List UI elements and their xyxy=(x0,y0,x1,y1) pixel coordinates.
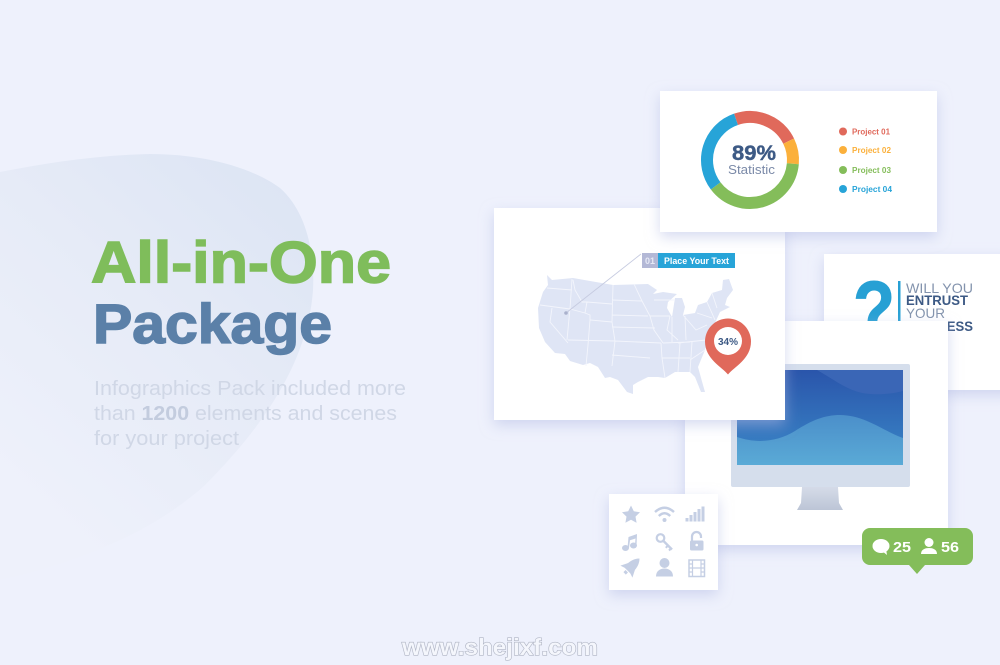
map pin xyxy=(705,318,751,374)
title xyxy=(91,230,391,355)
callout: social counters xyxy=(862,528,973,574)
icon: open lock xyxy=(690,532,704,550)
monitor screen xyxy=(737,370,903,465)
legend xyxy=(839,128,893,194)
question text: WILL YOU xyxy=(906,280,973,296)
leader line xyxy=(566,254,641,313)
person count: 56 xyxy=(941,539,959,556)
label: Place Your Text: Place Your Text xyxy=(664,256,730,267)
label: Place Your Text xyxy=(642,253,735,268)
question text: YOUR xyxy=(906,305,945,321)
comment count: 25 xyxy=(893,539,911,556)
label: Place Your Text: 01 xyxy=(645,256,656,267)
panel: monitor card xyxy=(685,321,948,545)
question text: BUSINESS xyxy=(906,318,973,334)
monitor body xyxy=(731,364,910,487)
description text: for your project xyxy=(94,428,239,450)
donut value: 89% xyxy=(732,142,776,165)
panel: USA map card xyxy=(494,208,785,420)
map pin: 34% xyxy=(718,337,738,348)
watermark: www.shejixf.com xyxy=(401,634,598,660)
donut chart xyxy=(707,117,793,203)
panel: statistic card xyxy=(660,91,937,232)
icon: wifi xyxy=(655,508,674,521)
legend: Project 02 xyxy=(852,146,892,155)
description text: Infographics Pack included more xyxy=(94,378,406,400)
legend: Project 03 xyxy=(852,166,892,175)
panel: icons card xyxy=(609,494,718,590)
description text xyxy=(94,378,406,450)
icon grid xyxy=(619,506,704,579)
icon: music note xyxy=(622,534,637,551)
icon: comment bubble xyxy=(872,539,890,555)
icon: film strip xyxy=(689,560,704,576)
title line: All-in-One: All-in-One xyxy=(91,230,391,296)
monitor stand xyxy=(797,487,843,510)
vertical bar xyxy=(898,281,900,323)
background blob xyxy=(0,154,313,580)
description text: than 1200 elements and scenes xyxy=(94,403,397,425)
icon: rocket xyxy=(619,553,645,579)
legend: Project 01 xyxy=(852,128,891,136)
question text: ENTRUST xyxy=(906,292,968,308)
legend: Project 04 xyxy=(852,185,893,194)
question text xyxy=(906,280,973,334)
icon: person xyxy=(921,538,937,554)
panel: question card xyxy=(824,254,1000,390)
icon: star xyxy=(622,506,640,523)
icon: signal bars xyxy=(686,506,704,522)
donut caption: Statistic xyxy=(728,162,776,177)
title line: Package: Package xyxy=(93,292,332,355)
USA map xyxy=(538,275,733,394)
icon: person xyxy=(656,558,673,576)
question mark: ? xyxy=(853,265,895,356)
icon: key xyxy=(657,534,672,550)
